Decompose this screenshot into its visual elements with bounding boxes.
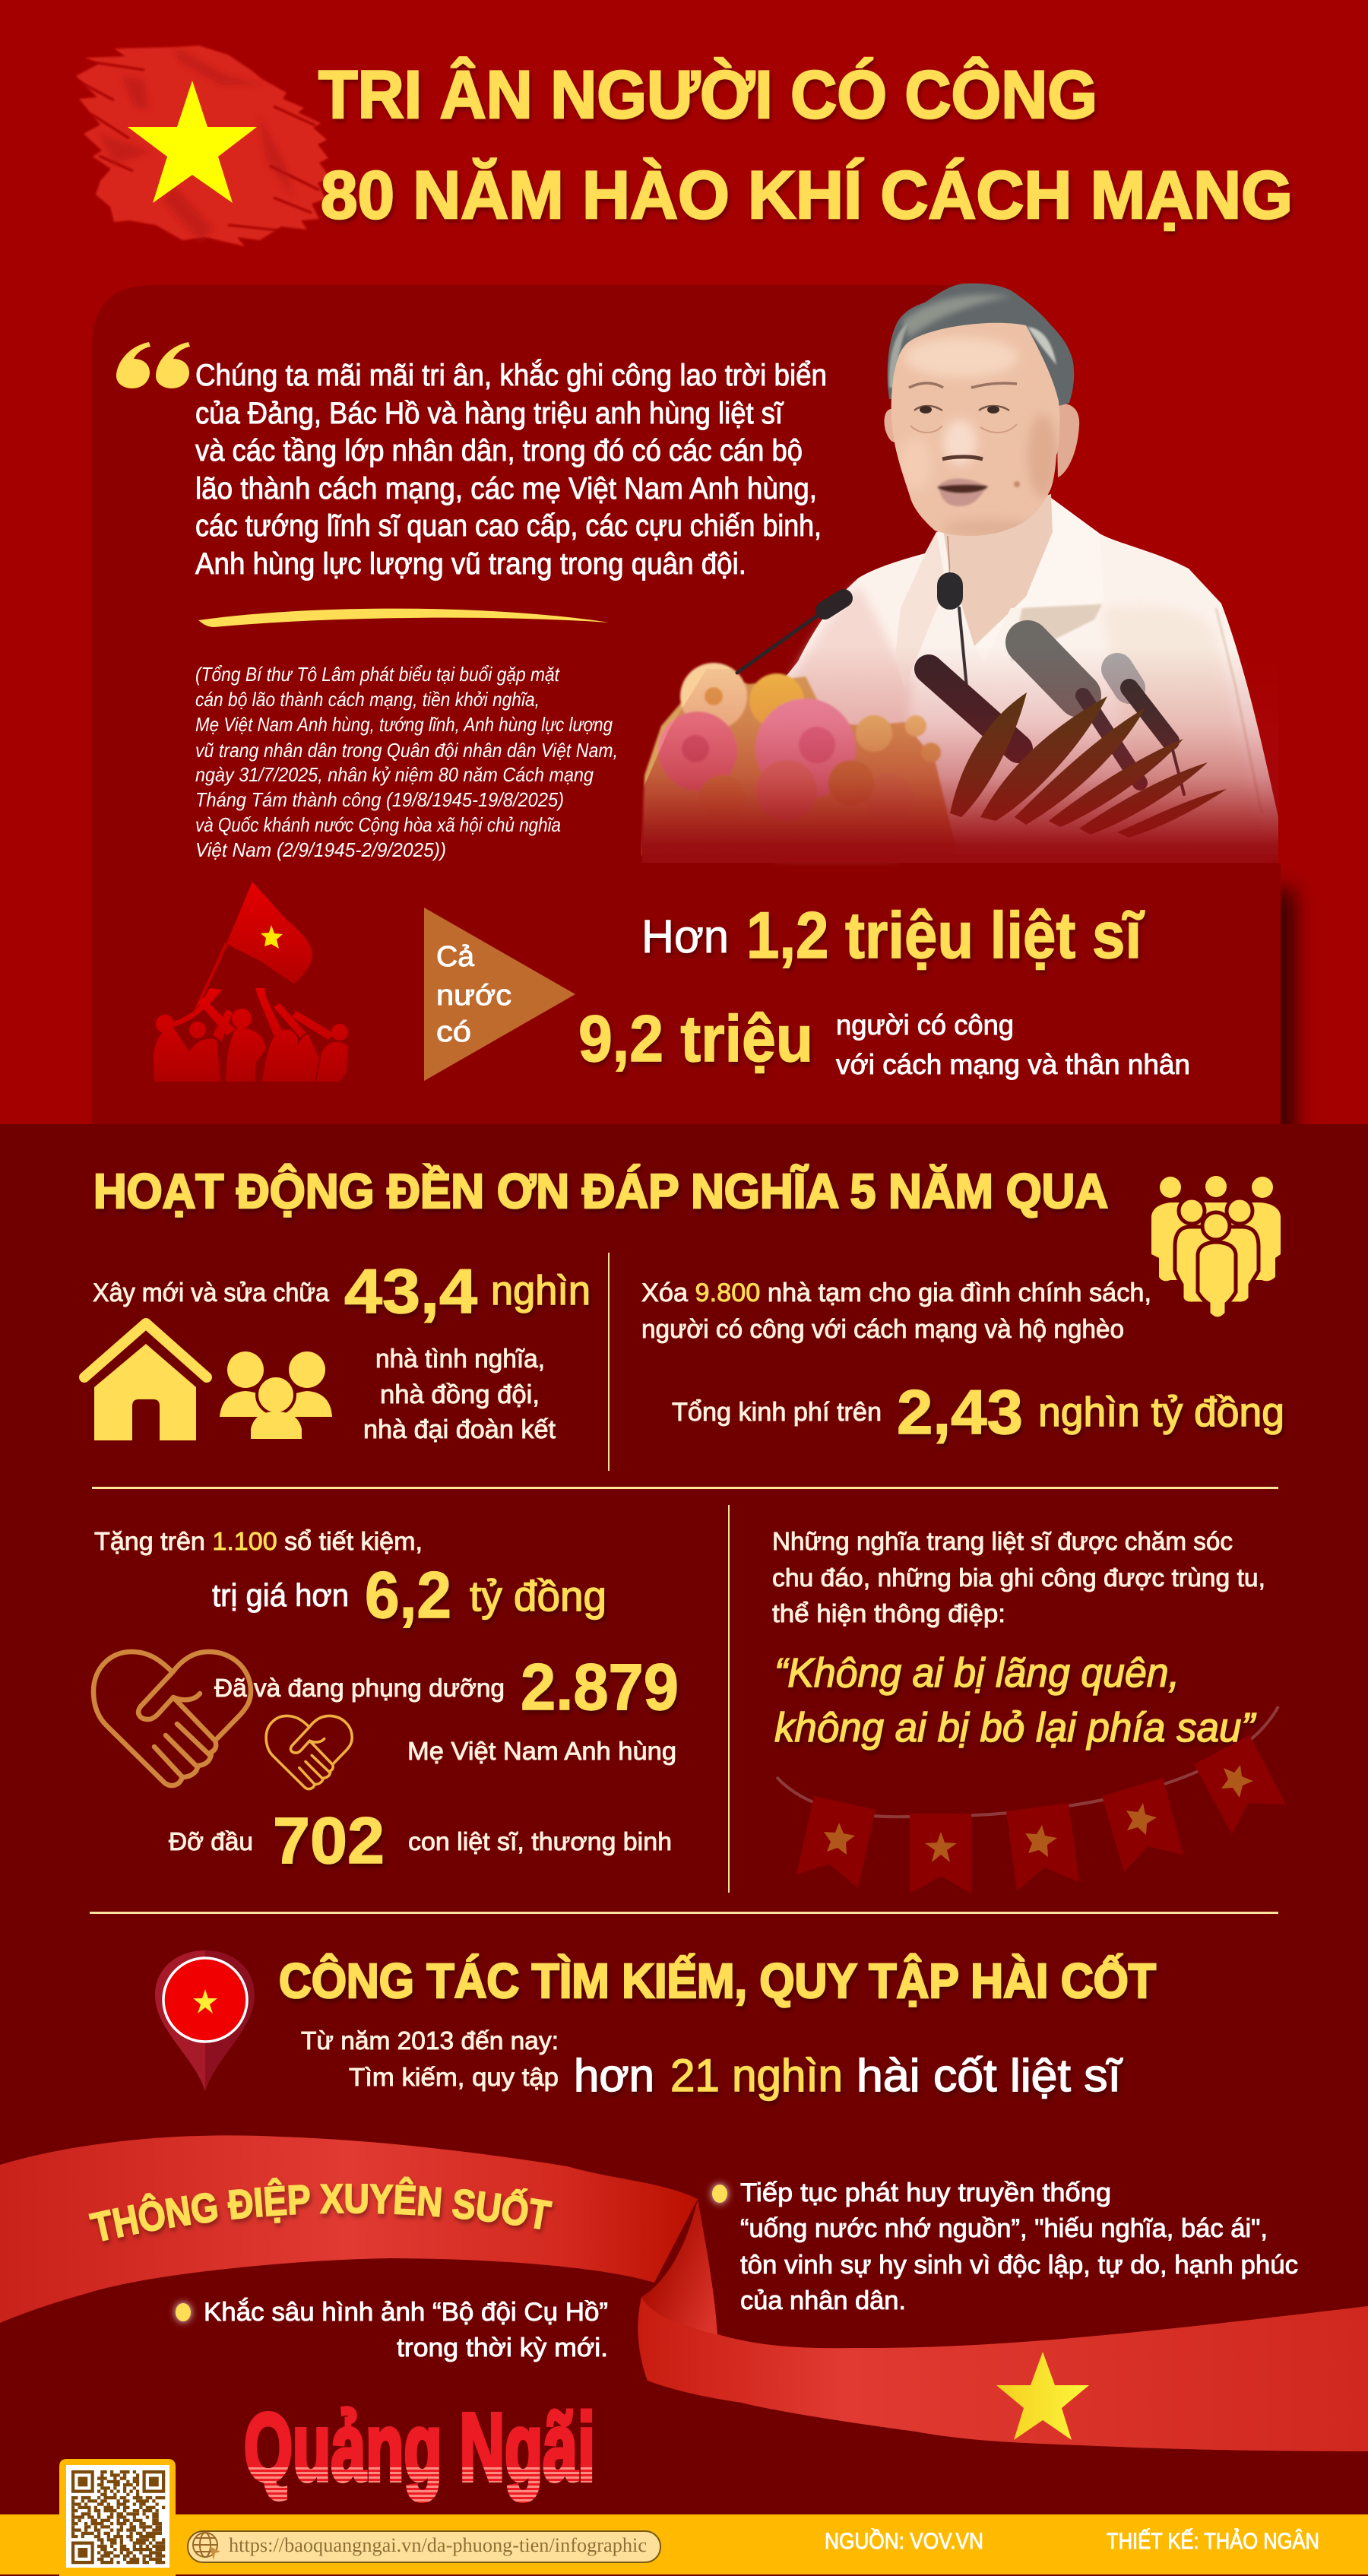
bullet text: bộ đội Cụ Hồ: Khắc sâu hình ảnh “Bộ đội Cụ Hồ” (204, 2298, 608, 2327)
ears (884, 409, 895, 442)
text: nghĩa trang liệt sĩ: thể hiện thông điệp: (772, 1599, 1005, 1627)
background: red top section (0, 0, 1368, 1124)
stat: đỡ đầu 702 (169, 1804, 672, 1877)
collar (895, 532, 946, 688)
icon: brushed Vietnamese flag (73, 46, 331, 246)
stat: tổng kinh phí: nghìn tỷ đồng (1038, 1389, 1284, 1435)
face (891, 323, 1060, 536)
stat: xây mới và sửa chữa: Xây mới và sửa chữa (93, 1278, 329, 1307)
icon: bunting flags (777, 1706, 1286, 1893)
quote text: của Đảng, Bác Hồ và hàng triệu anh hùng liệt sĩ (195, 397, 784, 430)
heading: thông điệp xuyên suốt: THÔNG ĐIỆP XUYÊN SUỐT (88, 2176, 556, 2246)
stat label: người có công (836, 1009, 1190, 1080)
arrow: Cả nước có: có (436, 1016, 471, 1048)
stat: 9,2 triệu: 9,2 triệu (578, 1003, 813, 1076)
url pill (188, 2531, 660, 2562)
text: tặng sổ tiết kiệm (94, 1527, 606, 1632)
text: nhà tình nghĩa (363, 1345, 556, 1444)
footer credits: NGUỒN: VOV.VN (825, 2528, 983, 2554)
footer bar (0, 2514, 1368, 2574)
icon: house (84, 1323, 207, 1440)
stat: hơn 21 nghìn hài cốt: hài cốt liệt sĩ (857, 2050, 1123, 2101)
stat: đỡ đầu 702: 702 (273, 1804, 385, 1877)
url pill: https://baoquangngai.vn/da-phuong-tien/infographic (229, 2534, 647, 2556)
text: nhà tình nghĩa: nhà đồng đội, (380, 1380, 540, 1409)
quote text: và các tầng lớp nhân dân, trong đó có các cán bộ (195, 434, 803, 467)
arrow: Cả nước có (424, 908, 575, 1081)
text: tặng sổ tiết kiệm: Tặng trên 1.100 sổ tiết kiệm, (94, 1527, 423, 1555)
quote: không ai bị lãng quên: “Không ai bị lãng quên, (774, 1650, 1180, 1696)
text: xóa nhà tạm: người có công với cách mạng và hộ nghèo (641, 1315, 1124, 1344)
arrow: Cả nước có: Cả (436, 941, 475, 973)
icon: map pin (155, 1950, 255, 2091)
bullet text: bộ đội Cụ Hồ: trong thời kỳ mới. (397, 2334, 608, 2362)
stat: xây mới và sửa chữa: nghìn (491, 1268, 591, 1313)
stat: phụng dưỡng 2.879: Mẹ Việt Nam Anh hùng (407, 1737, 676, 1765)
bullet text: uống nước nhớ nguồn: của nhân dân. (740, 2286, 906, 2315)
eyes and brows (909, 383, 1017, 459)
heading: hoạt động đền ơn đáp nghĩa: HOẠT ĐỘNG ĐỀN ƠN ĐÁP NGHĨA 5 NĂM QUA (93, 1163, 1108, 1218)
background: dark lower section (0, 1124, 1368, 2576)
stat label: người có công: với cách mạng và thân nhân (836, 1049, 1190, 1080)
text: từ năm 2013: Tìm kiếm, quy tập (349, 2063, 559, 2091)
stat: hơn 21 nghìn hài cốt: hơn (574, 2050, 654, 2101)
attribution text: vũ trang nhân dân trong Quân đội nhân dân Việt Nam, (195, 739, 618, 762)
panel: quote background (92, 285, 1281, 1124)
QR code (59, 2459, 176, 2576)
icon: group of people (1151, 1176, 1281, 1319)
logo: Quảng Ngãi: Quảng Ngãi (244, 2394, 595, 2501)
ribbon: upper left band (0, 2135, 698, 2323)
quote text (195, 358, 827, 581)
panel right shadow (1271, 889, 1294, 1193)
bullet text: uống nước nhớ nguồn: tôn vinh sự hy sinh vì độc lập, tự do, hạnh phúc (740, 2251, 1298, 2280)
text: từ năm 2013: Từ năm 2013 đến nay: (301, 2026, 559, 2055)
icon: quotation mark (116, 342, 190, 388)
brush divider (198, 609, 609, 627)
stat: hơn 21 nghìn hài cốt (574, 2050, 1123, 2101)
quote: không ai bị lãng quên (774, 1650, 1256, 1751)
footer credits: THIẾT KẾ: THẢO NGÂN (1107, 2528, 1319, 2554)
quote: không ai bị lãng quên: không ai bị bỏ lại phía sau” (774, 1705, 1256, 1751)
text: xóa nhà tạm (641, 1278, 1151, 1344)
attribution text (195, 663, 618, 861)
attribution text: ngày 31/7/2025, nhân kỷ niệm 80 năm Cách mạng (195, 763, 594, 786)
text: nghĩa trang liệt sĩ: chu đáo, những bia ghi công được trùng tu, (772, 1564, 1265, 1592)
ribbon: fold (641, 2199, 717, 2335)
text: nghĩa trang liệt sĩ (772, 1527, 1265, 1627)
stat: 1,2 triệu liệt sĩ: 1,2 triệu liệt sĩ (746, 899, 1145, 972)
icon: crowd raising flag (154, 882, 348, 1082)
text: nhà tình nghĩa: nhà đại đoàn kết (363, 1415, 556, 1444)
stat: phụng dưỡng 2.879 (214, 1651, 679, 1765)
ribbon: lower right band (638, 2297, 1368, 2451)
icon: small heart handshake (266, 1716, 352, 1789)
stat: tổng kinh phí: 2,43 (897, 1377, 1023, 1447)
stat: tổng kinh phí (672, 1377, 1284, 1447)
palm leaves (950, 692, 1227, 838)
mouth (938, 478, 988, 506)
attribution text: (Tổng Bí thư Tô Lâm phát biểu tại buổi gặp mặt (195, 663, 561, 686)
title (318, 56, 1293, 233)
text: tặng sổ tiết kiệm: 6,2 (365, 1559, 451, 1632)
bullet text: uống nước nhớ nguồn (712, 2178, 1298, 2315)
attribution text: Việt Nam (2/9/1945-2/9/2025)) (195, 838, 446, 861)
stat: hơn 21 nghìn hài cốt: 21 nghìn (670, 2050, 843, 2101)
text: tặng sổ tiết kiệm: trị giá hơn (212, 1577, 349, 1613)
photo bottom fade (642, 646, 1278, 863)
flowers (642, 663, 958, 855)
text: từ năm 2013 (301, 2026, 559, 2091)
quote text: Anh hùng lực lượng vũ trang trong quân đội. (195, 547, 746, 581)
title: 80 NĂM HÀO KHÍ CÁCH MẠNG (321, 157, 1293, 233)
neck (942, 494, 1053, 646)
text: xóa nhà tạm: Xóa 9.800 nhà tạm cho gia đình chính sách, (641, 1278, 1151, 1307)
arrow: Cả nước có: nước (436, 980, 511, 1012)
attribution text: và Quốc khánh nước Cộng hòa xã hội chủ nghĩa (195, 813, 561, 836)
text: tặng sổ tiết kiệm: tỷ đồng (470, 1572, 606, 1620)
attribution text: cán bộ lão thành cách mạng, tiền khởi nghĩa, (195, 688, 540, 711)
quote text: lão thành cách mạng, các mẹ Việt Nam Anh hùng, (195, 472, 817, 505)
bullet text: uống nước nhớ nguồn: Tiếp tục phát huy truyền thống (740, 2178, 1111, 2207)
text: nhà tình nghĩa: nhà tình nghĩa, (375, 1345, 545, 1374)
shirt (764, 498, 1278, 855)
bullet text: bộ đội Cụ Hồ (176, 2298, 608, 2362)
icon: three people (220, 1351, 332, 1439)
microphones (737, 585, 1184, 794)
title: TRI ÂN NGƯỜI CÓ CÔNG (318, 56, 1097, 132)
attribution text: Mẹ Việt Nam Anh hùng, tướng lĩnh, Anh hùng lực lượng (195, 713, 613, 736)
hair (888, 284, 1074, 407)
quote text: Chúng ta mãi mãi tri ân, khắc ghi công lao trời biển (195, 358, 827, 392)
stat label: người có công: người có công (836, 1009, 1014, 1041)
bullet text: uống nước nhớ nguồn: “uống nước nhớ nguồn”, "hiếu nghĩa, bác ái", (740, 2214, 1268, 2243)
heading: công tác tìm kiếm: CÔNG TÁC TÌM KIẾM, QUY TẬP HÀI CỐT (279, 1953, 1156, 2008)
photo: speaker at podium (642, 284, 1278, 863)
stat: phụng dưỡng 2.879: Đã và đang phụng dưỡng (214, 1674, 505, 1702)
stat: xây mới và sửa chữa: 43,4 (344, 1256, 477, 1326)
stat: đỡ đầu 702: Đỡ đầu (169, 1827, 253, 1855)
stat: 1,2 triệu liệt sĩ: Hơn (641, 911, 729, 962)
stat: tổng kinh phí: Tổng kinh phí trên (672, 1398, 882, 1427)
stat: đỡ đầu 702: con liệt sĩ, thương binh (408, 1827, 672, 1855)
text: nghĩa trang liệt sĩ: Những nghĩa trang liệt sĩ được chăm sóc (772, 1527, 1233, 1555)
footer credits (825, 2528, 1319, 2554)
attribution text: Tháng Tám thành công (19/8/1945-19/8/2025) (195, 788, 564, 811)
icon: big heart handshake (93, 1652, 251, 1785)
stat: phụng dưỡng 2.879: 2.879 (521, 1651, 679, 1724)
stat: xây mới và sửa chữa (93, 1256, 591, 1326)
icon: ribbon star (996, 2352, 1089, 2440)
quote text: các tướng lĩnh sĩ quan cao cấp, các cựu chiến binh, (195, 509, 822, 543)
